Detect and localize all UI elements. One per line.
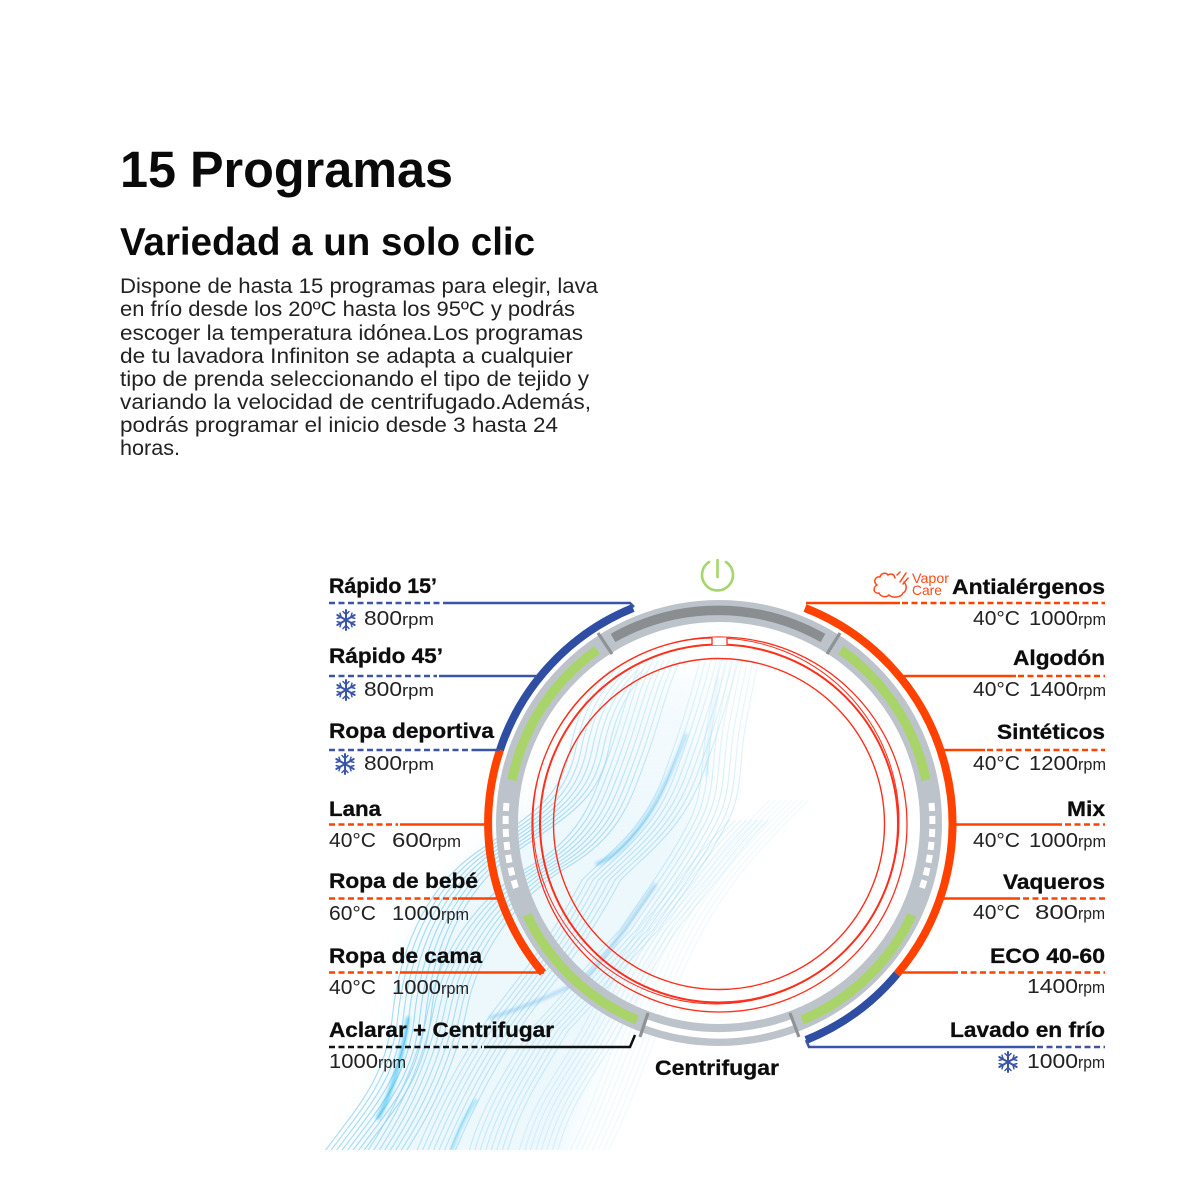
program: Rápido 15: Rápido 15’ — [329, 575, 437, 598]
body text block: podrás programar el inicio desde 3 hasta 24 — [120, 414, 558, 437]
program: Rápido 45: Rápido 45’ — [329, 645, 443, 668]
program: Sintéticos — [940, 721, 1106, 775]
program: Aclarar + Centrifugar — [329, 1019, 635, 1073]
program: Rápido 15: rpm — [402, 610, 434, 629]
program: Sintéticos: rpm — [1078, 755, 1106, 774]
program: Ropa de cama — [329, 945, 544, 999]
program: Ropa de bebé: Ropa de bebé — [329, 870, 478, 893]
program: Ropa de bebé: 1000 — [392, 903, 441, 925]
program: Ropa de bebé — [329, 870, 497, 925]
program: Antialérgenos: rpm — [1078, 610, 1106, 629]
program: Rápido 45: 800 — [364, 679, 402, 701]
program: Vaqueros: Vaqueros — [1003, 871, 1105, 894]
title: 15 Programas — [120, 141, 453, 198]
outer coloured arcs — [488, 608, 952, 1040]
program: Mix — [953, 798, 1106, 852]
program: Algodón: Algodón — [1013, 647, 1105, 670]
program: ECO 40-60 — [896, 945, 1105, 998]
program: Ropa de cama: rpm — [441, 979, 469, 998]
program: Ropa de cama: 40°C — [329, 977, 376, 999]
body text block — [120, 275, 598, 460]
program: Ropa de bebé: rpm — [441, 905, 469, 924]
control dial — [488, 608, 952, 1040]
body text block: Dispone de hasta 15 programas para elegir, lava — [120, 275, 598, 298]
label: Centrifugar: Centrifugar — [655, 1057, 779, 1080]
program: Ropa deportiva: Ropa deportiva — [329, 720, 494, 743]
program: Ropa deportiva: 800 — [364, 753, 402, 775]
body text block: horas. — [120, 437, 180, 460]
program: Aclarar + Centrifugar: rpm — [378, 1053, 406, 1072]
program: Lana: 600 — [392, 830, 432, 852]
program: Rápido 15: 800 — [364, 608, 402, 630]
program: Aclarar + Centrifugar: 1000 — [329, 1051, 378, 1073]
red drum circles — [532, 637, 907, 1012]
program: Lavado en frío: Lavado en frío — [950, 1019, 1105, 1042]
segment separators — [598, 633, 840, 1037]
program: Mix: Mix — [1067, 798, 1105, 821]
program: Sintéticos: 40°C — [973, 753, 1020, 775]
icon: vapor care: Vapor — [912, 570, 949, 586]
program: Antialérgenos: Antialérgenos — [952, 576, 1105, 599]
program: Sintéticos: Sintéticos — [997, 721, 1105, 744]
program: Antialérgenos: 1000 — [1029, 608, 1078, 630]
program: Antialérgenos: 40°C — [973, 608, 1020, 630]
subtitle: Variedad a un solo clic — [120, 221, 535, 264]
program: Lavado en frío — [806, 1019, 1105, 1073]
program: Lana — [329, 798, 485, 852]
program: Rápido 15 — [329, 575, 634, 630]
program: Lana: 40°C — [329, 830, 376, 852]
program: Lavado en frío: rpm — [1078, 1053, 1105, 1072]
body text block: tipo de prenda seleccionando el tipo de tejido y — [120, 368, 590, 391]
icon: vapor care: Care — [912, 582, 942, 598]
program: Vaqueros: rpm — [1078, 904, 1105, 923]
icon: vapor care — [874, 570, 949, 598]
program: Algodón: 40°C — [973, 679, 1020, 701]
program: Mix: 1000 — [1029, 830, 1078, 852]
program: Algodón: rpm — [1078, 681, 1106, 700]
program: Vaqueros: 40°C — [973, 902, 1020, 924]
program: Ropa de cama: Ropa de cama — [329, 945, 482, 968]
program: ECO 40-60: rpm — [1078, 978, 1105, 997]
body text block: de tu lavadora Infiniton se adapta a cualquier — [120, 345, 573, 368]
program: Mix: rpm — [1078, 832, 1106, 851]
program: Ropa deportiva: rpm — [402, 755, 434, 774]
body text block: escoger la temperatura idónea.Los programas — [120, 322, 583, 345]
program: Ropa de bebé: 60°C — [329, 903, 376, 925]
program: Vaqueros: 800 — [1035, 902, 1078, 924]
program: Algodón — [903, 647, 1106, 701]
green and grey segments — [512, 610, 926, 1020]
blue wave background — [322, 660, 808, 1170]
body text block: en frío desde los 20ºC hasta los 95ºC y podrás — [120, 298, 575, 321]
program: Rápido 45 — [329, 645, 537, 701]
dial ring — [506, 611, 932, 1035]
program: Lavado en frío: 1000 — [1027, 1051, 1078, 1073]
program: Mix: 40°C — [973, 830, 1020, 852]
program: Algodón: 1400 — [1029, 679, 1078, 701]
program: Lana: Lana — [329, 798, 381, 821]
program: Lana: rpm — [432, 832, 461, 851]
icon: power — [702, 560, 733, 590]
body text block: variando la velocidad de centrifugado.Además, — [120, 391, 591, 414]
program: Sintéticos: 1200 — [1029, 753, 1078, 775]
program: ECO 40-60: 1400 — [1027, 976, 1078, 998]
program: Rápido 45: rpm — [402, 681, 434, 700]
program: Ropa deportiva — [329, 720, 500, 775]
program: Antialérgenos — [806, 576, 1106, 630]
program: ECO 40-60: ECO 40-60 — [990, 945, 1105, 968]
program: Vaqueros — [941, 871, 1105, 924]
program: Ropa de cama: 1000 — [392, 977, 441, 999]
program: Aclarar + Centrifugar: Aclarar + Centrifugar — [329, 1019, 554, 1042]
